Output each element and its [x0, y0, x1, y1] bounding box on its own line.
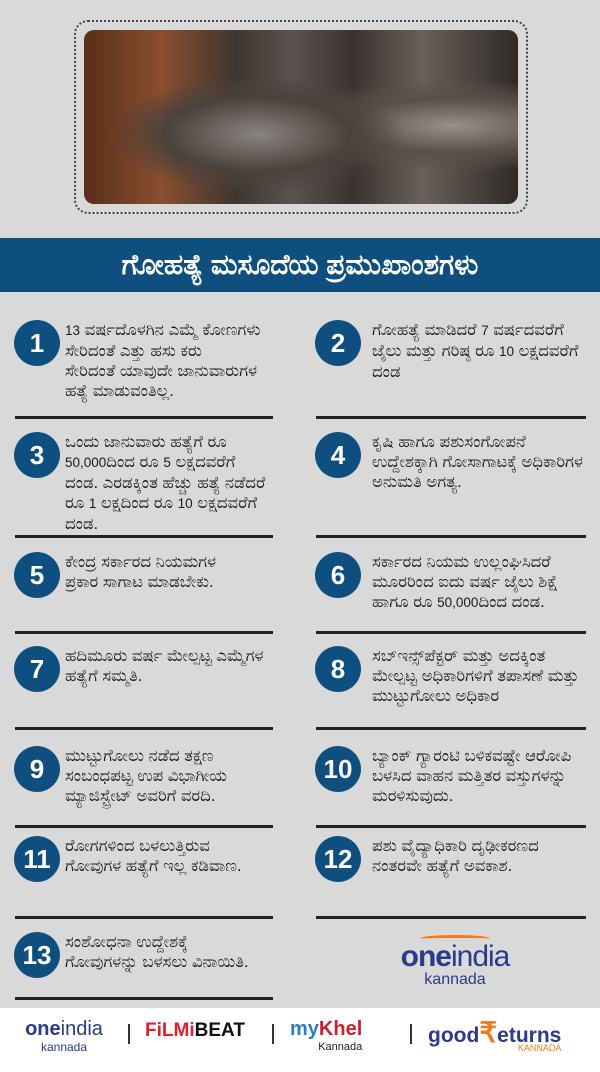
logo: oneindia kannada — [401, 935, 510, 988]
item 6: ಹಾಗೂ ರೂ 50,000ದಿಂದ ದಂಡ. — [372, 593, 545, 611]
footer logos: FiLMiBEAT — [145, 1020, 245, 1041]
item 12 — [315, 836, 539, 882]
footer logos: Kannada — [318, 1041, 362, 1053]
item 3: ದಂಡ. ಎರಡಕ್ಕಿಂತ ಹೆಚ್ಚು ಹತ್ಯೆ ನಡೆದರೆ — [65, 474, 265, 492]
item 13: 13 — [23, 940, 51, 970]
item 6: ಮೂರರಿಂದ ಐದು ವರ್ಷ ಜೈಲು ಶಿಕ್ಷೆ — [372, 573, 558, 591]
item 1: ಹತ್ಯೆ ಮಾಡುವಂತಿಲ್ಲ. — [65, 382, 174, 400]
item 3: 50,000ದಿಂದ ರೂ 5 ಲಕ್ಷದವರೆಗೆ — [65, 453, 235, 471]
footer logos: oneindia — [25, 1018, 103, 1040]
photo: cattle — [84, 30, 518, 204]
item 12: 12 — [324, 844, 352, 874]
item 5: ಪ್ರಕಾರ ಸಾಗಾಟ ಮಾಡಬೇಕು. — [65, 573, 214, 591]
item 10: 10 — [324, 754, 352, 784]
item 4: 4 — [331, 440, 345, 470]
logo: oneindia kannada: kannada — [424, 971, 486, 988]
item 8: ಸಬ್‌ಇನ್ಸ್‌ಪೆಕ್ಟರ್ ಮತ್ತು ಅದಕ್ಕಿಂತ — [372, 647, 545, 665]
item 3: ರೂ 1 ಲಕ್ಷದಿಂದ ರೂ 10 ಲಕ್ಷದವರೆಗೆ — [65, 494, 257, 512]
item 13: ಗೋವುಗಳನ್ನು ಬಳಸಲು ವಿನಾಯಿತಿ. — [65, 953, 249, 971]
item 2: ಗೋಹತ್ಯೆ ಮಾಡಿದರೆ 7 ವರ್ಷದವರೆಗೆ — [372, 321, 564, 339]
item 2 — [315, 320, 578, 381]
title bar: ಗೋಹತ್ಯೆ ಮಸೂದೆಯ ಪ್ರಮುಖಾಂಶಗಳು — [122, 249, 478, 280]
item 10: ಮರಳಿಸುವುದು. — [372, 787, 453, 805]
footer logos — [0, 1008, 600, 1072]
logo: oneindia kannada: oneindia — [401, 940, 509, 973]
item 7: ಹತ್ಯೆಗೆ ಸಮ್ಮತಿ. — [65, 667, 142, 685]
item 5 — [14, 552, 216, 598]
item 7: ಹದಿಮೂರು ವರ್ಷ ಮೇಲ್ಪಟ್ಟ ಎಮ್ಮೆಗಳ — [65, 647, 264, 665]
item 11: 11 — [23, 844, 51, 874]
item 1: ಸೇರಿದಂತೆ ಎತ್ತು ಹಸು ಕರು — [65, 342, 202, 360]
title bar — [0, 238, 600, 292]
item 9: ಸಂಬಂಧಪಟ್ಟ ಉಪ ವಿಭಾಗೀಯ — [65, 767, 227, 785]
item 8 — [315, 646, 579, 706]
item 4: ಕೃಷಿ ಹಾಗೂ ಪಶುಸಂಗೋಪನೆ — [372, 433, 526, 451]
item 4: ಉದ್ದೇಶಕ್ಕಾಗಿ ಗೋಸಾಗಾಟಕ್ಕೆ ಅಧಿಕಾರಿಗಳ — [372, 453, 583, 471]
item 2: 2 — [331, 328, 345, 358]
item 1 — [14, 320, 261, 402]
item 6: 6 — [331, 560, 345, 590]
item 9 — [14, 746, 227, 808]
item 9: ಮುಟ್ಟುಗೋಲು ನಡೆದ ತಕ್ಷಣ — [65, 747, 214, 765]
photo frame — [74, 20, 528, 214]
item 3: ಒಂದು ಜಾನುವಾರು ಹತ್ಯೆಗೆ ರೂ — [65, 433, 227, 451]
item 6: ಸರ್ಕಾರದ ನಿಯಮ ಉಲ್ಲಂಘಿಸಿದರೆ — [372, 553, 551, 571]
item 9: ಮ್ಯಾಜಿಸ್ಟ್ರೇಟ್ ಅವರಿಗೆ ವರದಿ. — [65, 787, 215, 805]
item 8: ಮೇಲ್ಪಟ್ಟ ಅಧಿಕಾರಿಗಳಿಗೆ ತಪಾಸಣೆ ಮತ್ತು — [372, 667, 579, 685]
item 13 — [14, 932, 249, 978]
item 3: ದಂಡ. — [65, 515, 98, 533]
item 2: ಜೈಲು ಮತ್ತು ಗರಿಷ್ಠ ರೂ 10 ಲಕ್ಷದವರೆಗೆ — [372, 342, 578, 360]
item 8: 8 — [331, 654, 345, 684]
item 12: ಪಶು ವೈದ್ಯಾಧಿಕಾರಿ ದೃಢೀಕರಣದ — [372, 837, 539, 855]
item 1: 13 ವರ್ಷದೊಳಗಿನ ಎಮ್ಮೆ ಕೋಣಗಳು — [65, 321, 261, 339]
item 4 — [315, 432, 583, 494]
item 5: ಕೇಂದ್ರ ಸರ್ಕಾರದ ನಿಯಮಗಳ — [65, 553, 216, 571]
item 5: 5 — [30, 560, 44, 590]
item 2: ದಂಡ — [372, 363, 400, 381]
item 6 — [315, 552, 558, 611]
item 11 — [14, 836, 242, 882]
item 3: 3 — [30, 440, 44, 470]
item 1: ಸೇರಿದಂತೆ ಯಾವುದೇ ಜಾನುವಾರುಗಳ — [65, 362, 257, 380]
item 9: 9 — [30, 754, 44, 784]
item 11: ಗೋವುಗಳ ಹತ್ಯೆಗೆ ಇಲ್ಲ ಕಡಿವಾಣ. — [65, 857, 242, 875]
footer logos: myKhel — [290, 1018, 362, 1040]
item 7: 7 — [30, 654, 44, 684]
footer logos: KANNADA — [518, 1043, 561, 1053]
item 11: ರೋಗಗಳಿಂದ ಬಳಲುತ್ತಿರುವ — [65, 837, 210, 855]
item 13: ಸಂಶೋಧನಾ ಉದ್ದೇಶಕ್ಕೆ — [65, 933, 188, 951]
item 10: ಬ್ಯಾಂಕ್ ಗ್ಯಾರಂಟಿ ಬಳಿಕವಷ್ಟೇ ಆರೋಪಿ — [372, 747, 571, 765]
item 12: ನಂತರವೇ ಹತ್ಯೆಗೆ ಅವಕಾಶ. — [372, 857, 512, 875]
item 10 — [315, 746, 571, 805]
item 4: ಅನುಮತಿ ಅಗತ್ಯ. — [372, 473, 462, 491]
item 10: ಬಳಸಿದ ವಾಹನ ಮತ್ತಿತರ ವಸ್ತುಗಳನ್ನು — [372, 767, 566, 785]
item 3 — [14, 432, 266, 533]
item 1: 1 — [30, 328, 44, 358]
item 8: ಮುಟ್ಟುಗೋಲು ಅಧಿಕಾರ — [372, 687, 499, 705]
footer logos: good₹eturns — [428, 1017, 561, 1048]
item 7 — [14, 646, 264, 692]
footer logos: kannada — [41, 1040, 87, 1054]
